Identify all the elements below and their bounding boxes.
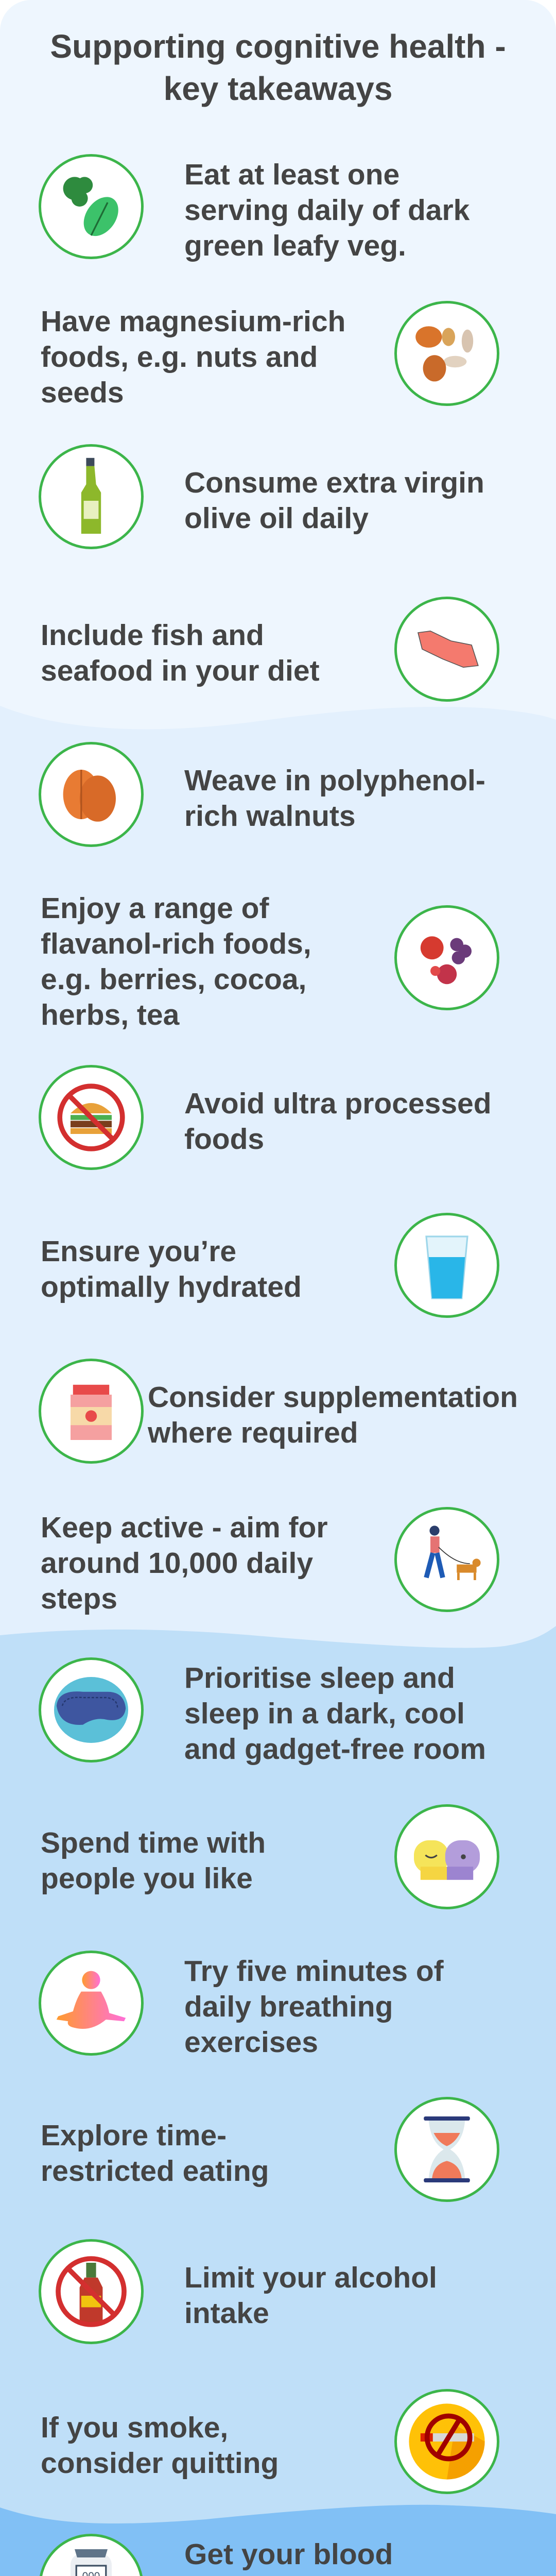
icon: meditation [39,1951,144,2056]
title: key takeaways [164,70,392,107]
text: breathing: daily breathing [184,1990,393,2023]
text: ultra processed: Avoid ultra processed [184,1087,492,1120]
icon: nuts [394,301,499,406]
text: walnuts [184,764,485,833]
icon: sleep mask [39,1657,144,1762]
icon: no alcohol [39,2239,144,2344]
text: ultra processed [184,1087,492,1156]
text: magnesium [41,305,345,409]
text: smoking: consider quitting [41,2447,279,2480]
text: leafy greens: green leafy veg. [184,229,406,262]
text: walnuts: Weave in polyphenol- [184,764,485,797]
text: alcohol: intake [184,2297,269,2330]
title: Supporting cognitive health - [50,28,506,65]
icon: supplement [39,1359,144,1464]
text: flavanol: e.g. berries, cocoa, [41,963,306,996]
text: keep active: Keep active - aim for [41,1511,328,1544]
text: sleep [184,1662,486,1766]
text: breathing: exercises [184,2026,318,2059]
icon: olive oil [39,444,144,549]
text: supplementation: Consider supplementation [148,1381,518,1414]
text: magnesium: Have magnesium-rich [41,305,345,338]
text: ultra processed: foods [184,1123,264,1156]
icon: no smoking [394,2389,499,2494]
icon: walnut [39,742,144,847]
text: breathing: Try five minutes of [184,1955,444,1988]
text: people: Spend time with [41,1826,266,1859]
text: olive oil: Consume extra virgin [184,466,484,499]
icon: salmon [394,597,499,702]
text: time-restricted eating: restricted eating [41,2155,269,2188]
icon: no ultra processed [39,1065,144,1170]
text: flavanol: herbs, tea [41,998,179,1031]
text: leafy greens: serving daily of dark [184,194,470,227]
text: keep active [41,1511,328,1615]
text: fish: seafood in your diet [41,654,320,687]
icon: leafy greens [39,154,144,259]
text: time-restricted eating: Explore time- [41,2119,227,2152]
text: olive oil: olive oil daily [184,502,369,535]
text: flavanol: Enjoy a range of [41,892,269,925]
icon: friends [394,1804,499,1909]
text: alcohol [184,2261,437,2330]
icon: water glass [394,1213,499,1318]
text: keep active: steps [41,1582,117,1615]
text: smoking [41,2411,279,2480]
text: hydration [41,1235,302,1303]
text: sleep: sleep in a dark, cool [184,1697,465,1730]
text: magnesium: foods, e.g. nuts and [41,341,318,374]
text: magnesium: seeds [41,376,124,409]
icon: blood pressure monitor [39,2534,144,2576]
text: walnuts: rich walnuts [184,800,356,833]
text: olive oil [184,466,484,535]
text: sleep: Prioritise sleep and [184,1662,455,1694]
text: alcohol: Limit your alcohol [184,2261,437,2294]
text: people: people you like [41,1862,253,1895]
title [50,28,506,107]
text: flavanol: flavanol-rich foods, [41,927,311,960]
icon: walking with dog [394,1507,499,1612]
text: keep active: around 10,000 daily [41,1547,313,1580]
text: sleep: and gadget-free room [184,1733,486,1766]
text: breathing [184,1955,444,2059]
text: fish [41,619,320,687]
text: supplementation [147,1381,518,1449]
text: leafy greens [184,158,470,262]
text: fish: Include fish and [41,619,264,652]
text: hydration: Ensure you’re [41,1235,236,1268]
icon: berries [394,905,499,1010]
text: flavanol [41,892,311,1031]
icon: hourglass [394,2097,499,2202]
text: smoking: If you smoke, [41,2411,228,2444]
text: blood pressure: Get your blood [184,2538,393,2571]
text: supplementation: where required [148,1416,358,1449]
text: hydration: optimally hydrated [41,1270,302,1303]
text: leafy greens: Eat at least one [184,158,399,191]
text: time-restricted eating [41,2119,269,2188]
text: people [41,1826,266,1895]
